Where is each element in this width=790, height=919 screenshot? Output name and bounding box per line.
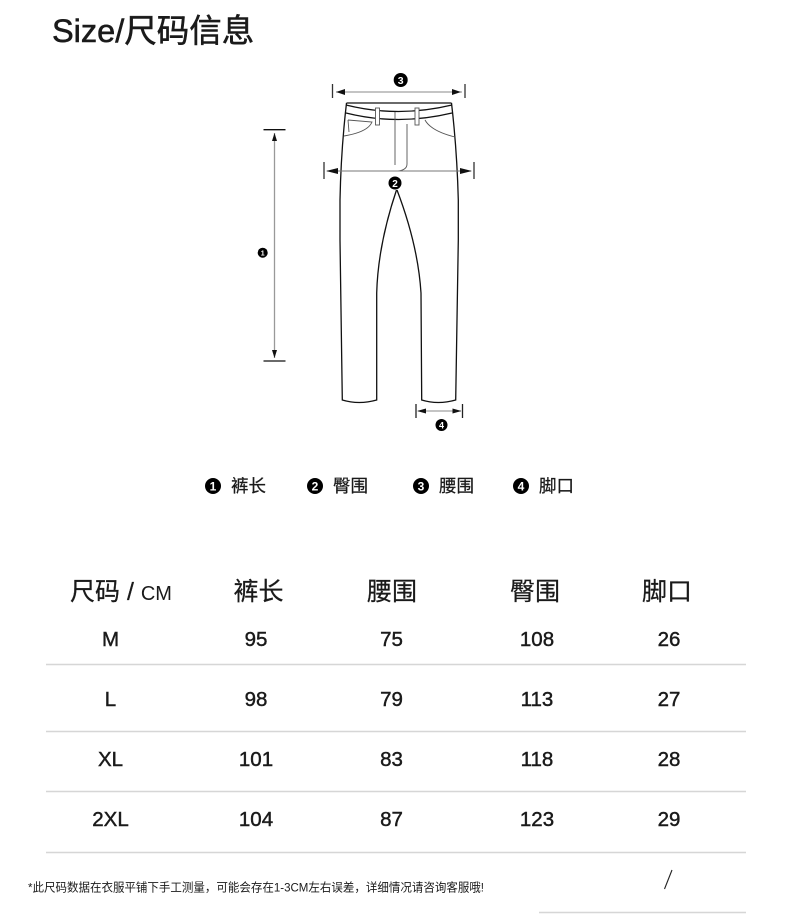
table header: 裤长	[233, 578, 284, 606]
badge 1	[258, 248, 268, 258]
arrow: waist	[332, 84, 465, 98]
badge 3	[394, 73, 408, 87]
legend: length	[205, 476, 266, 496]
row: M: 75	[380, 628, 403, 651]
row: M: 108	[520, 628, 554, 651]
legend: waist: 3	[418, 480, 425, 494]
row: L: 27	[658, 688, 680, 711]
badge 4: 4	[439, 420, 444, 430]
legend: hip: 臀围	[333, 476, 368, 496]
row: M: M	[102, 628, 119, 651]
row: M: 95	[245, 628, 267, 651]
row: L: 79	[380, 688, 403, 711]
row: 2XL: 104	[239, 808, 273, 831]
row: XL: XL	[98, 748, 123, 771]
table header: 尺码 / CM	[70, 578, 172, 606]
row: 2XL: 123	[520, 808, 554, 831]
row: XL: 118	[521, 748, 553, 771]
row: XL: 28	[658, 748, 680, 771]
jeans outline	[340, 103, 458, 402]
row: 2XL: 2XL	[92, 808, 129, 831]
table header: 脚口	[642, 578, 692, 606]
row: XL: 83	[380, 748, 403, 771]
arrow: hip	[324, 162, 474, 179]
table header: 腰围	[367, 578, 417, 606]
row: 2XL: 87	[380, 808, 403, 831]
row: XL: 101	[239, 748, 273, 771]
legend: waist: 腰围	[439, 476, 474, 496]
table header	[70, 578, 692, 606]
arrow: length	[264, 130, 286, 361]
row: L: 98	[245, 688, 267, 711]
row: M	[102, 628, 680, 651]
legend: hem: 4	[518, 480, 525, 494]
legend: waist	[413, 476, 474, 496]
footnote: *此尺码数据在衣服平铺下手工测量，可能会存在1-3CM左右误差，详细情况请咨询客服哦!	[28, 880, 484, 894]
row: L	[105, 688, 680, 711]
row: M: 26	[658, 628, 680, 651]
legend: hip: 2	[312, 480, 319, 494]
legend: length: 裤长	[231, 476, 266, 496]
title: Size/尺码信息	[52, 13, 254, 49]
row: L: 113	[521, 688, 553, 711]
arrow: hem	[416, 404, 462, 418]
badge 4	[436, 419, 448, 431]
slash mark	[664, 870, 672, 889]
row: XL	[98, 748, 680, 771]
badge 2: 2	[392, 179, 398, 190]
legend: hem	[513, 476, 574, 496]
table header: 臀围	[510, 578, 560, 606]
size table	[46, 578, 746, 912]
legend: hem: 脚口	[539, 476, 574, 496]
row: 2XL: 29	[658, 808, 680, 831]
row: 2XL	[92, 808, 680, 831]
legend	[205, 476, 574, 496]
badge 1: 1	[261, 250, 265, 258]
legend: length: 1	[210, 480, 217, 494]
badge 2	[388, 176, 402, 190]
legend: hip	[307, 476, 368, 496]
row: L: L	[105, 688, 116, 711]
badge 3: 3	[398, 75, 404, 87]
jeans diagram	[258, 73, 474, 431]
